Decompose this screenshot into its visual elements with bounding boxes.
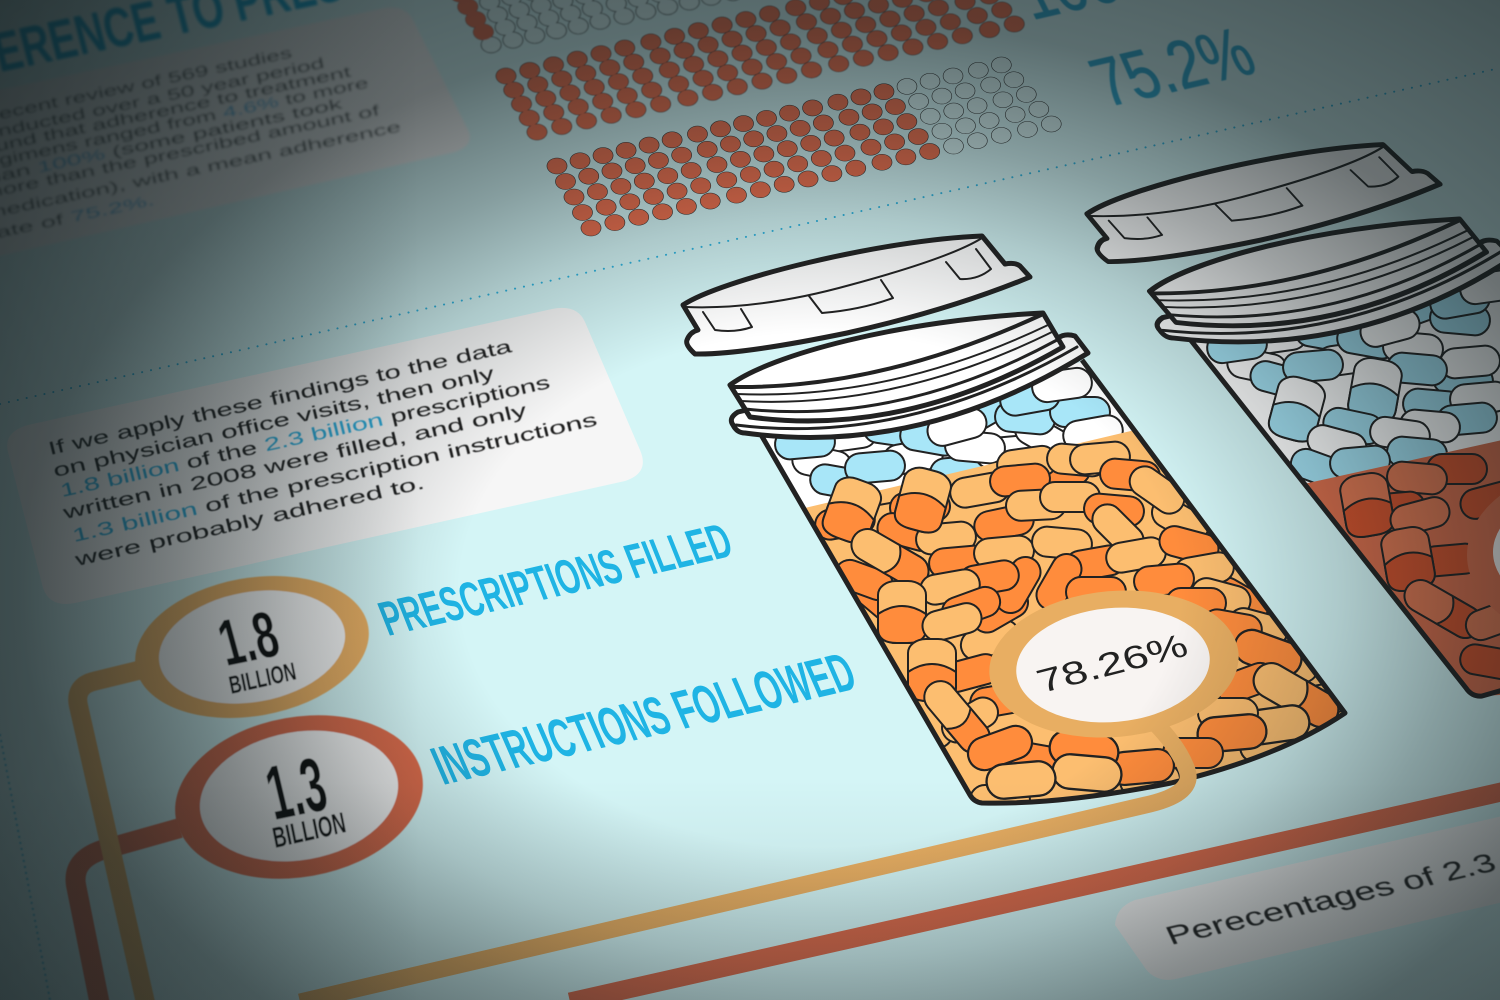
- bottle 2 percentage badge: [1467, 496, 1500, 606]
- panel: study review text: [0, 8, 470, 258]
- bottle 2: contents: [1196, 270, 1500, 696]
- bottle 1: percentage badge: [983, 580, 1245, 748]
- bottle 1 blue and white pills: [774, 366, 1125, 502]
- bottle 1: lid and neck: [683, 236, 1088, 438]
- bottle 1: outline: [760, 360, 1345, 803]
- bottom edge darkening: [0, 780, 1500, 1000]
- left edge darkening: [0, 0, 420, 1000]
- bottle 2: lid and neck: [1075, 144, 1500, 343]
- badge: 1.3 billion: BILLION: [270, 807, 349, 855]
- badge: 1.8 billion: 1.8: [210, 597, 286, 679]
- bottle 2 blue pills: [1205, 268, 1500, 493]
- red long line: [570, 790, 1500, 1000]
- bottle 1: orange connector line: [300, 718, 1188, 1000]
- bottle 2: outline: [1189, 338, 1500, 696]
- panel: application of findings: If we apply these findings to the data: [46, 335, 515, 459]
- badge: 1.3 billion: [162, 697, 436, 897]
- bottle 1: percentage badge: 78.26%: [1031, 627, 1193, 700]
- panel: application of findings: 1.8 billion of the 2.3 billion prescriptions: [58, 371, 552, 501]
- pill grid: 75.2 percent: [557, 64, 1054, 228]
- badge: 1.3 billion: 1.3: [258, 741, 334, 836]
- label: prescriptions filled: PRESCRIPTIONS FILLED: [371, 513, 740, 646]
- pill grid: top row: [450, 0, 914, 45]
- stat: 75.2 percent: 75.2%: [1079, 14, 1267, 121]
- bottle 2 red pills: [1338, 454, 1500, 682]
- left margin dotted line: [0, 735, 50, 1000]
- connector: red line from 1.3 billion: [76, 828, 180, 1000]
- panel: application of findings: were probably adhered to.: [71, 472, 426, 570]
- section divider: dotted line: [0, 68, 1500, 404]
- panel: application of findings: written in 2008 were filled, and only: [59, 399, 530, 523]
- badge: 1.8 billion: BILLION: [227, 657, 299, 700]
- panel: application of findings: on physician office visits, then only: [51, 362, 497, 481]
- panel: application of findings: [7, 308, 643, 604]
- pill grid: full: [506, 0, 1016, 132]
- connector: orange line from 1.8 billion: [78, 670, 146, 1000]
- panel: percentages caption: Perecentages of 2.3: [1161, 848, 1500, 950]
- label: instructions followed: INSTRUCTIONS FOLLOWED: [423, 641, 865, 796]
- panel: application of findings: 1.3 billion of the prescription instructions: [70, 408, 599, 546]
- bottle 1 orange pills: [813, 440, 1352, 815]
- bottle 1: contents: [766, 362, 1342, 801]
- panel: percentages caption: [1115, 812, 1500, 980]
- badge: 1.8 billion: [124, 559, 380, 735]
